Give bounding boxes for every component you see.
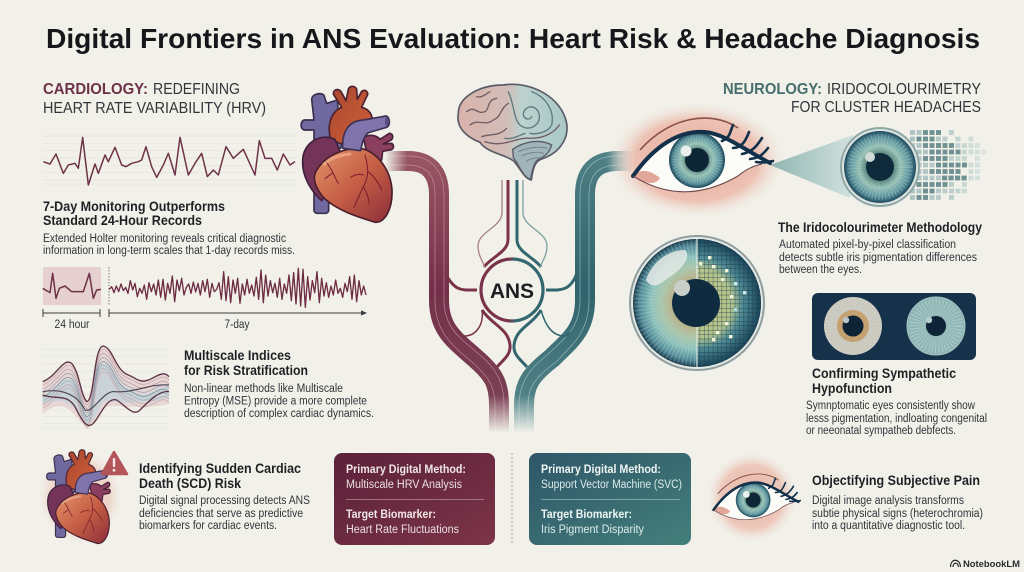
ANS pathway diagram — [385, 84, 636, 433]
sudden cardiac death text: Death (SCD) Risk — [139, 476, 241, 491]
red nerve trunk — [385, 156, 510, 432]
icon: eye with magnified iris and pixels — [605, 100, 987, 220]
panel: cardiology — [36, 81, 374, 547]
sudden cardiac death text: deficiencies that serve as predictive — [139, 508, 303, 520]
summary panel: cardiology — [334, 453, 495, 545]
icon: half-pixelated iris — [630, 236, 764, 370]
neurology section heading: FOR CLUSTER HEADACHES — [791, 99, 981, 116]
sympathetic hypofunction text: Confirming Sympathetic — [812, 366, 956, 381]
NotebookLM badge: NotebookLM — [963, 559, 1020, 570]
summary panel: neurology — [529, 453, 691, 545]
summary panel: cardiology: Primary Digital Method: — [346, 464, 466, 476]
multiscale indices text: Non-linear methods like Multiscale — [184, 383, 343, 395]
icon: heart with warning — [36, 447, 127, 547]
objectifying pain text: Digital image analysis transforms — [812, 495, 964, 507]
title: Digital Frontiers in ANS Evaluation: Heart Risk & Headache Diagnosis — [46, 23, 980, 54]
24-hour vs 7-day comparison chart — [43, 267, 367, 331]
icon: small eye — [705, 450, 800, 544]
neurology section heading: NEUROLOGY: — [723, 81, 822, 98]
multiscale indices text — [184, 348, 374, 420]
iridocolourimeter text: detects subtle iris pigmentation differences — [779, 252, 977, 264]
multiscale indices text: for Risk Stratification — [184, 363, 308, 378]
neurology section heading: IRIDOCOLOURIMETRY — [827, 81, 981, 98]
summary panel: neurology: Iris Pigment Disparity — [541, 524, 644, 536]
iridocolourimeter text: The Iridocolourimeter Methodology — [778, 220, 982, 235]
sympathetic hypofunction text: or neeonatal sympatheb debfects. — [806, 425, 956, 437]
sympathetic hypofunction text: lesss pigmentation, indloating congenital — [806, 413, 987, 425]
neurology section heading — [723, 81, 981, 116]
cardiology section heading — [43, 81, 266, 117]
summary panel: neurology: Support Vector Machine (SVC) — [541, 479, 682, 491]
iridocolourimeter text: Automated pixel-by-pixel classification — [779, 239, 956, 251]
objectifying pain text: Objectifying Subjective Pain — [812, 473, 980, 488]
objectifying pain text — [812, 473, 983, 532]
sympathetic hypofunction text: Hypofunction — [812, 381, 892, 396]
panel: neurology — [605, 81, 987, 544]
multiscale indices text: Multiscale Indices — [184, 348, 291, 363]
ANS node — [481, 259, 543, 321]
teal nerve trunk — [514, 156, 632, 432]
7-day monitoring text: information in long-term scales that 1-day records miss. — [43, 245, 295, 257]
sudden cardiac death text: Digital signal processing detects ANS — [139, 495, 310, 507]
summary panel: cardiology: Multiscale HRV Analysis — [346, 479, 462, 491]
sudden cardiac death text: Identifying Sudden Cardiac — [139, 461, 301, 476]
sudden cardiac death text — [139, 461, 310, 532]
HRV waveform chart — [43, 136, 297, 185]
ANS node: ANS — [490, 280, 534, 303]
cardiology section heading: REDEFINING — [153, 81, 240, 98]
objectifying pain text: into a quantitative diagnostic tool. — [812, 520, 965, 532]
7-day monitoring text: Extended Holter monitoring reveals critical diagnostic — [43, 233, 286, 245]
7-day monitoring text: 7-Day Monitoring Outperforms — [43, 199, 225, 214]
icon: large heart — [301, 86, 393, 222]
7-day monitoring text: Standard 24-Hour Records — [43, 213, 202, 228]
24-hour vs 7-day comparison chart: 7-day — [224, 319, 250, 331]
iridocolourimeter text — [778, 220, 982, 276]
cardiology section heading: CARDIOLOGY: — [43, 81, 148, 98]
7-day monitoring text — [43, 199, 295, 257]
summary panel: cardiology: Target Biomarker: — [346, 509, 436, 521]
cardiology section heading: HEART RATE VARIABILITY (HRV) — [43, 100, 266, 117]
objectifying pain text: subtie physical signs (heterochromia) — [812, 508, 983, 520]
sympathetic hypofunction text: Symnptomatic eyes consistently show — [806, 400, 976, 412]
iridocolourimeter text: between the eyes. — [779, 264, 862, 276]
icon: brain — [458, 84, 567, 180]
multiscale entropy chart — [43, 346, 169, 428]
multiscale indices text: description of complex cardiac dynamics. — [184, 408, 374, 420]
sudden cardiac death text: biomarkers for cardiac events. — [139, 520, 277, 532]
iris comparison panel — [812, 293, 976, 360]
24-hour vs 7-day comparison chart: 24 hour — [54, 319, 90, 331]
summary panel: cardiology: Heart Rate Fluctuations — [346, 524, 459, 536]
summary panel: neurology: Primary Digital Method: — [541, 464, 661, 476]
sympathetic hypofunction text — [806, 366, 987, 437]
summary panel: neurology: Target Biomarker: — [541, 509, 632, 521]
multiscale indices text: Entropy (MSE) provide a more complete — [184, 396, 367, 408]
